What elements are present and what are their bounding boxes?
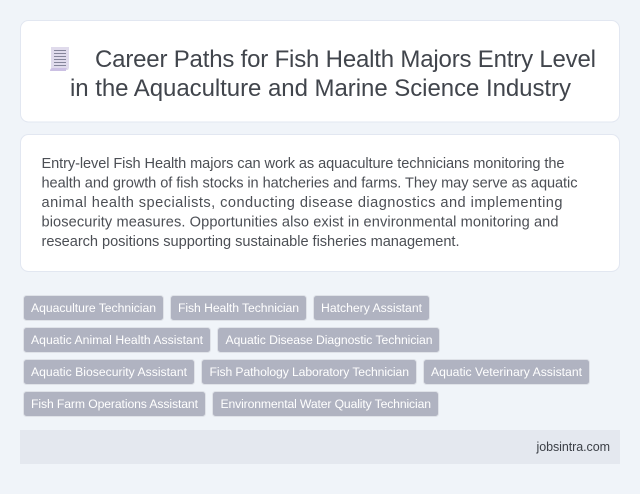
tag: Aquaculture Technician: Aquaculture Technician bbox=[31, 301, 156, 315]
panel: title card bbox=[20, 20, 620, 122]
tag: Aquatic Animal Health Assistant: Aquatic Animal Health Assistant bbox=[31, 333, 204, 347]
tag: Aquatic Veterinary Assistant bbox=[424, 360, 590, 384]
title text bbox=[70, 46, 596, 102]
tag: Fish Health Technician bbox=[170, 296, 306, 320]
tag: Fish Farm Operations Assistant: Fish Farm Operations Assistant bbox=[31, 397, 199, 411]
job tags bbox=[24, 296, 590, 416]
tag: Hatchery Assistant bbox=[314, 296, 430, 320]
title text: in the Aquaculture and Marine Science Industry bbox=[70, 75, 571, 102]
icon: document scroll bbox=[50, 47, 69, 71]
footer source text: jobsintra.com bbox=[536, 440, 610, 454]
tag: Hatchery Assistant: Hatchery Assistant bbox=[321, 301, 423, 315]
footer bar bbox=[20, 430, 620, 464]
tag: Aquatic Disease Diagnostic Technician bbox=[218, 328, 440, 352]
tag: Fish Farm Operations Assistant bbox=[24, 392, 206, 416]
tag: Aquatic Biosecurity Assistant bbox=[24, 360, 194, 384]
description text: biosecurity measures. Opportunities also exist in environmental monitoring and bbox=[42, 214, 558, 230]
tag: Aquatic Biosecurity Assistant: Aquatic Biosecurity Assistant bbox=[31, 365, 188, 379]
description text: Entry-level Fish Health majors can work as aquaculture technicians monitoring the bbox=[42, 156, 564, 172]
description text: animal health specialists, conducting disease diagnostics and implementing bbox=[42, 195, 562, 211]
tag: Environmental Water Quality Technician bbox=[212, 392, 438, 416]
tag: Aquaculture Technician bbox=[24, 296, 164, 320]
tag: Fish Pathology Laboratory Technician bbox=[202, 360, 416, 384]
tag: Fish Health Technician: Fish Health Technician bbox=[178, 301, 299, 315]
description text: research positions supporting sustainable fisheries management. bbox=[42, 234, 460, 250]
tag: Fish Pathology Laboratory Technician: Fish Pathology Laboratory Technician bbox=[210, 365, 409, 379]
description text bbox=[42, 156, 578, 250]
title text: Career Paths for Fish Health Majors Entry Level bbox=[95, 46, 596, 73]
tag: Aquatic Animal Health Assistant bbox=[24, 328, 210, 352]
tag: Aquatic Veterinary Assistant: Aquatic Veterinary Assistant bbox=[431, 365, 583, 379]
panel: description card bbox=[20, 134, 620, 272]
tag: Environmental Water Quality Technician: Environmental Water Quality Technician bbox=[220, 397, 431, 411]
tag: Aquatic Disease Diagnostic Technician: Aquatic Disease Diagnostic Technician bbox=[226, 333, 432, 347]
description text: health and growth of fish stocks in hatcheries and farms. They may serve as aquatic bbox=[42, 176, 578, 192]
